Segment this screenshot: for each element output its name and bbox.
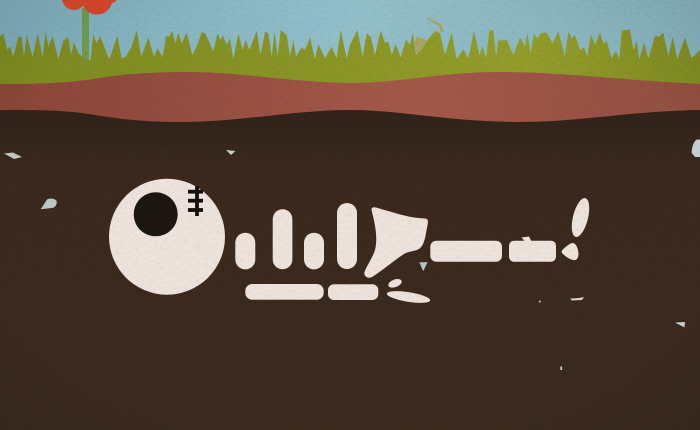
soil layer (0, 110, 700, 430)
flower petals (62, 0, 117, 14)
sky (0, 0, 700, 90)
arm bones (245, 277, 431, 305)
stitches (188, 186, 203, 216)
clay layer (0, 72, 700, 125)
bone fragments (4, 140, 700, 370)
foot bones (562, 196, 593, 260)
dead leaf and twig (415, 18, 444, 56)
flower stem (82, 8, 89, 62)
grass (0, 29, 700, 90)
ribs (235, 203, 357, 269)
skeleton (109, 179, 593, 305)
grass blades left (0, 30, 350, 90)
pelvis (364, 207, 428, 278)
grass blades right (350, 29, 700, 90)
eye socket (134, 192, 178, 236)
leg bones (430, 236, 556, 262)
flower (62, 0, 117, 62)
skull (109, 179, 225, 295)
